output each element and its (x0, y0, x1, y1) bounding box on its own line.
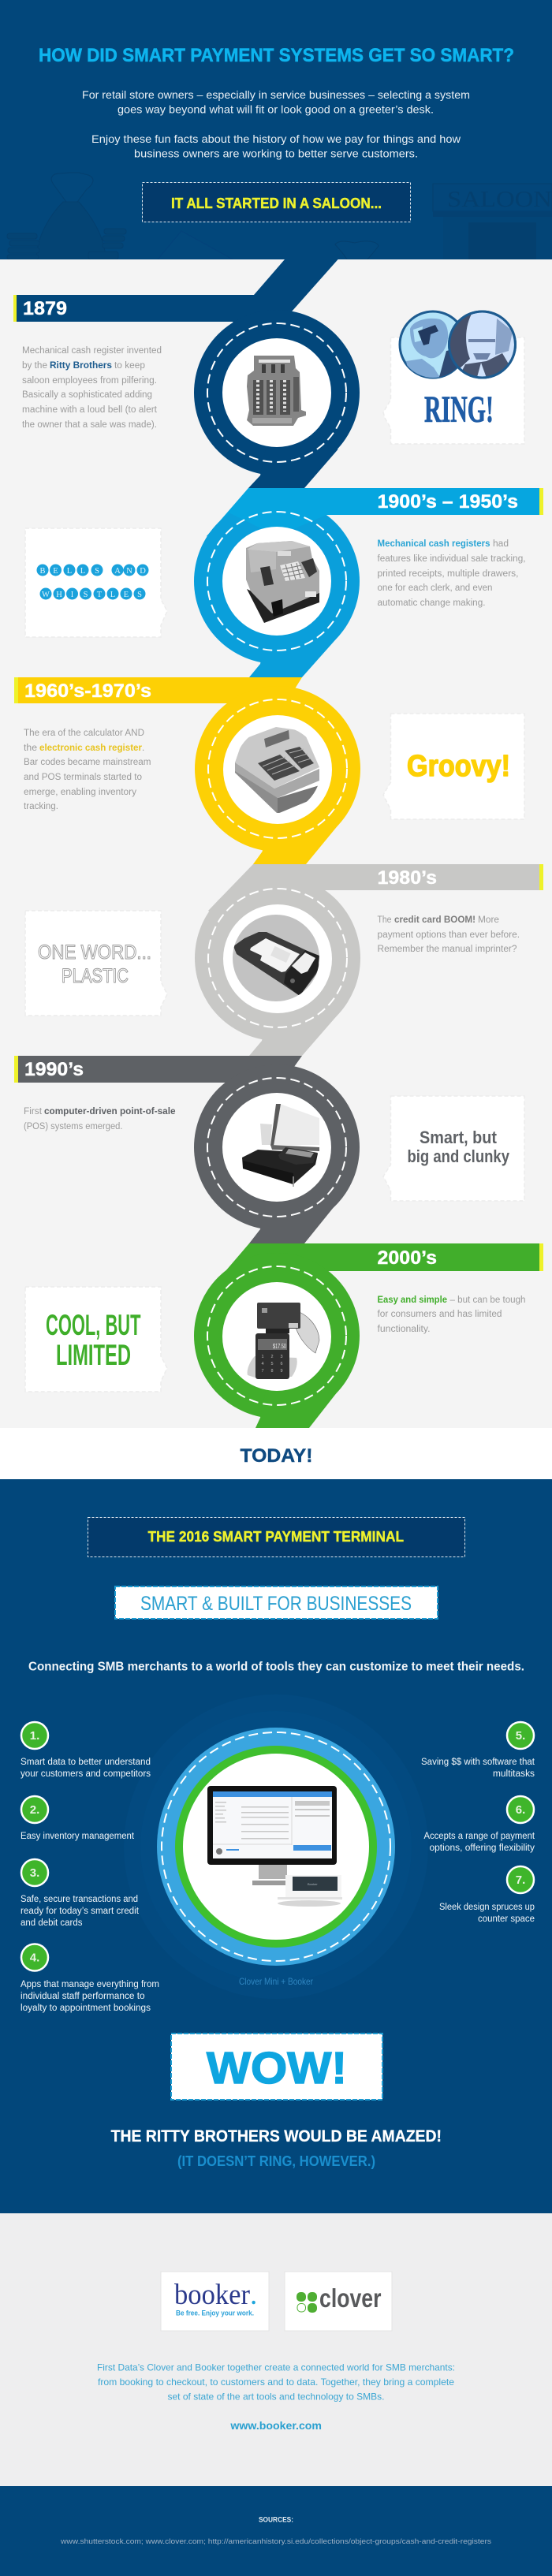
callout box: ring (383, 311, 524, 444)
text: 1960s description: tracking. (24, 802, 58, 811)
exclamation: ring: RING! (424, 389, 494, 431)
text: 1960s description (24, 729, 151, 811)
exclamation: bells and whistles letters: H (56, 591, 62, 599)
text: 1960s description: electronic cash register (39, 744, 143, 753)
feature 4: loyalty to appointment bookings (21, 2004, 151, 2013)
text: 1879 description: Ritty Brothers (50, 361, 112, 371)
timeline step: 2000s (194, 1243, 543, 1428)
feature 7 (439, 1866, 535, 1924)
intro text: For retail store owners – especially in service businesses – selecting a system (82, 88, 470, 101)
callout: the 2016 smart payment terminal (88, 1517, 465, 1556)
icon: computer point-of-sale system (242, 1104, 319, 1187)
feature 6: options, offering flexibility (429, 1843, 535, 1853)
callout box: smart but big and clunky: Smart, but (420, 1128, 498, 1147)
callout: the 2016 smart payment terminal: THE 2016 SMART PAYMENT TERMINAL (148, 1528, 404, 1545)
logo: booker: booker (174, 2279, 250, 2311)
text: 1980s description: More (478, 915, 499, 925)
caption: clover mini + booker: Clover Mini + Booker (239, 1976, 313, 1987)
feature 4 (21, 1944, 159, 2013)
text: 1900s description: features like individual sale tracking, (377, 554, 525, 564)
text: 1879 description: Basically a sophisticated adding (22, 390, 152, 400)
text: 1900s description: Mechanical cash registers (377, 539, 490, 549)
text: 1980s description: payment options than ever before. (377, 930, 520, 940)
icon: mobile card reader: $17.50 (273, 1343, 286, 1350)
panel: timeline background (0, 259, 552, 1428)
sources heading: SOURCES: (259, 2515, 293, 2525)
panel: smart terminal background (0, 1479, 552, 2213)
intro text (82, 88, 470, 159)
text: 1980s description: credit card BOOM! (394, 915, 476, 925)
text: 1879 description: saloon employees from pilfering. (22, 376, 157, 386)
exclamation: bells and whistles letters: W (42, 591, 50, 599)
year label: 1900s-1950s: 1900’s – 1950’s (377, 491, 518, 513)
feature 3: Safe, secure transactions and (21, 1895, 138, 1904)
feature 2: Easy inventory management (21, 1832, 135, 1841)
callout box: cool but limited: LIMITED (56, 1339, 131, 1371)
year label: 1879: 1879 (23, 298, 67, 319)
text: 1900s description: automatic change making. (377, 598, 486, 608)
icon: clover mini terminal: Booker (308, 1882, 318, 1886)
callout box: one word plastic: PLASTIC (62, 965, 129, 987)
feature 6: Accepts a range of payment (424, 1832, 535, 1841)
exclamation: bells and whistles letters: S (95, 567, 99, 576)
callout box: groovy: Groovy! (407, 750, 510, 783)
text: 1990s description: (POS) systems emerged. (24, 1122, 123, 1131)
text: 2000s description: Easy and simple (377, 1295, 447, 1305)
text: 1960s description: The era of the calculator AND (24, 729, 144, 738)
callout: it all started in a saloon: IT ALL STARTED IN A SALOON... (171, 195, 382, 211)
feature 6: 6. (516, 1803, 525, 1817)
icon: left Ritty brother portrait (399, 311, 457, 378)
text: 1879 description (22, 346, 162, 430)
exclamation: bells and whistles letters: E (124, 591, 129, 599)
feature 3: and debit cards (21, 1918, 83, 1928)
text: partner description: from booking to checkout, to customers and to data. Together, they bring a complete (98, 2377, 454, 2388)
feature 7: counter space (478, 1914, 535, 1924)
feature 7: 7. (516, 1873, 525, 1887)
text: 2000s description: for consumers and has limited (377, 1310, 502, 1319)
icon: clover mini terminal (278, 1875, 342, 1907)
icon: antique cash register (247, 356, 306, 426)
icon: mechanical cash register (246, 541, 319, 623)
year label: 1960s-1970s: 1960’s-1970’s (24, 680, 151, 702)
panel: header background (0, 0, 552, 259)
feature 5: Saving $$ with software that (421, 1758, 535, 1767)
feature 3 (21, 1859, 140, 1928)
text: partner description: First Data’s Clover and Booker together create a connected world for SMB merchants: (97, 2362, 455, 2373)
subheading: it doesn't ring: (IT DOESN’T RING, HOWEVER.) (177, 2153, 375, 2169)
icon: mobile card reader: 4 (261, 1362, 264, 1366)
exclamation: bells and whistles letters: I (71, 591, 74, 599)
exclamation: bells and whistles letters: B (39, 567, 46, 576)
text: 2000s description (377, 1295, 525, 1334)
text: 1900s description (377, 539, 525, 608)
text: 1980s description: Remember the manual imprinter? (377, 945, 517, 954)
text: 1879 description: by the (22, 361, 47, 371)
exclamation: bells and whistles letters: S (84, 591, 88, 599)
feature 5: multitasks (493, 1769, 535, 1779)
timeline step: 1980s (195, 864, 543, 1056)
callout box: cool but limited (25, 1287, 167, 1392)
exclamation: bells and whistles letters (39, 567, 146, 599)
logo: booker (161, 2272, 269, 2331)
background sketch: playing cards (158, 231, 233, 259)
icon: monitor with booker software (207, 1786, 337, 1885)
feature 6 (424, 1796, 535, 1853)
background sketch: saloon building: SALOON (447, 187, 552, 212)
callout box: bells and whistles (25, 528, 167, 637)
feature 1: Smart data to better understand (21, 1758, 151, 1767)
text: partner description (97, 2362, 455, 2402)
timeline step: 1960s-1970s (14, 677, 360, 864)
heading: ritty brothers would be amazed: THE RITTY BROTHERS WOULD BE AMAZED! (111, 2127, 442, 2145)
logo: booker: Be free. Enjoy your work. (176, 2309, 254, 2318)
exclamation: bells and whistles letters: L (67, 567, 72, 576)
text: 2000s description: – but can be tough (449, 1295, 525, 1305)
callout: wow (171, 2034, 382, 2100)
link: booker website: www.booker.com (229, 2419, 322, 2432)
icon: mobile card reader: 7 (261, 1369, 264, 1374)
exclamation: bells and whistles letters: D (140, 567, 146, 576)
text: 1960s description: . (142, 744, 144, 753)
text: 1960s description: emerge, enabling inventory (24, 788, 136, 797)
feature 4: individual staff performance to (21, 1992, 145, 2001)
callout box: smart but big and clunky: big and clunky (407, 1146, 510, 1166)
year label: 1990s: 1990’s (24, 1059, 84, 1080)
text: partner description: set of state of the art tools and technology to SMBs. (167, 2391, 385, 2402)
feature 4: 4. (30, 1951, 39, 1965)
feature 1: 1. (30, 1729, 39, 1743)
text: 1879 description: machine with a loud bell (to alert (22, 405, 158, 415)
icon: mobile card reader: 8 (270, 1369, 274, 1374)
subheading: connecting merchants: Connecting SMB merchants to a world of tools they can customize to meet their needs. (28, 1661, 524, 1673)
exclamation: bells and whistles letters: A (114, 567, 121, 576)
intro text: goes way beyond what will fit or look good on a greeter’s desk. (117, 103, 434, 115)
callout: smart and built for businesses (115, 1586, 438, 1619)
feature 2 (21, 1796, 135, 1841)
exclamation: bells and whistles letters: T (97, 591, 103, 599)
logo: clover: clover (319, 2283, 382, 2313)
feature 3: ready for today’s smart credit (21, 1907, 140, 1916)
panel: partners background (0, 2213, 552, 2486)
sources list: www.shutterstock.com; www.clover.com; http://americanhistory.si.edu/collections/object-groups/cash-and-credit-registers (60, 2537, 491, 2546)
text: 1900s description: printed receipts, multiple drawers, (377, 569, 519, 579)
exclamation: bells and whistles letters: N (126, 567, 132, 576)
text: 1960s description: and POS terminals started to (24, 773, 142, 782)
icon: mobile card reader: 5 (270, 1362, 274, 1366)
panel: today band (0, 1428, 552, 1479)
text: 1980s description: The (377, 915, 391, 925)
icon: mobile card reader: 2 (270, 1355, 274, 1359)
text: 1879 description: Mechanical cash register invented (22, 346, 162, 356)
text: 1990s description: First (24, 1107, 43, 1117)
icon: mobile card reader: 1 (261, 1355, 264, 1359)
icon: mobile card reader: 3 (280, 1355, 283, 1359)
callout box: groovy (383, 714, 524, 819)
title: HOW DID SMART PAYMENT SYSTEMS GET SO SMART? (39, 45, 514, 66)
exclamation: bells and whistles letters: L (110, 591, 115, 599)
icon: mobile card reader (248, 1303, 319, 1379)
timeline step: 1900s-1950s (194, 488, 543, 677)
icon: right Ritty brother portrait (448, 311, 516, 380)
logo: booker: . (250, 2279, 257, 2311)
text: 1980s description (377, 915, 520, 954)
text: 2000s description: functionality. (377, 1325, 431, 1334)
callout box: one word plastic: ONE WORD... (38, 941, 151, 964)
timeline step: 1990s (14, 1056, 360, 1243)
feature 5: 5. (516, 1729, 525, 1743)
callout box: one word plastic (25, 911, 167, 1016)
callout: it all started in a saloon (142, 183, 410, 222)
feature 3: 3. (30, 1866, 39, 1880)
icon: mobile card reader: 9 (280, 1369, 283, 1374)
feature 7: Sleek design spruces up (439, 1903, 535, 1912)
background sketch: saloon building (433, 184, 552, 259)
panel: footer background (0, 2486, 552, 2576)
icon: mobile card reader: 6 (280, 1362, 283, 1366)
background sketch: money bag and coins (7, 173, 126, 260)
exclamation: bells and whistles letters: E (53, 567, 58, 576)
year label: 1980s: 1980’s (377, 867, 437, 889)
text: 1900s description: had (493, 539, 509, 549)
intro text: business owners are working to better serve customers. (134, 147, 418, 159)
text: 1990s description: computer-driven point-of-sale (44, 1107, 175, 1117)
diagram: central product circle (124, 1694, 428, 1999)
intro text: Enjoy these fun facts about the history of how we pay for things and how (91, 132, 461, 145)
exclamation: bells and whistles letters: L (80, 567, 85, 576)
text: 1900s description: one for each clerk, and even (377, 583, 492, 593)
feature 1 (21, 1722, 151, 1779)
callout: smart and built for businesses: SMART & BUILT FOR BUSINESSES (140, 1593, 412, 1615)
logo: clover (285, 2272, 392, 2331)
feature 2: 2. (30, 1803, 39, 1817)
feature 1: your customers and competitors (21, 1769, 151, 1779)
callout: wow: WOW! (207, 2043, 347, 2093)
feature 4: Apps that manage everything from (21, 1980, 159, 1989)
icon: electronic cash register (235, 727, 319, 814)
heading: today: TODAY! (240, 1445, 312, 1467)
text: 1960s description: Bar codes became mainstream (24, 758, 151, 767)
timeline step: 1879 (13, 259, 360, 488)
callout box: smart but big and clunky (383, 1096, 524, 1201)
text: 1960s description: the (24, 744, 37, 753)
text: 1990s description (24, 1107, 175, 1131)
icon: manual card imprinter (233, 915, 319, 1001)
background sketch: second money bag (335, 241, 379, 259)
exclamation: bells and whistles letters: S (137, 591, 142, 599)
text: 1879 description: to keep (114, 361, 145, 371)
callout box: cool but limited: COOL, BUT (46, 1309, 141, 1341)
year label: 2000s: 2000’s (377, 1247, 437, 1269)
text: 1879 description: the owner that a sale was made). (22, 420, 157, 430)
feature 5 (421, 1722, 535, 1779)
